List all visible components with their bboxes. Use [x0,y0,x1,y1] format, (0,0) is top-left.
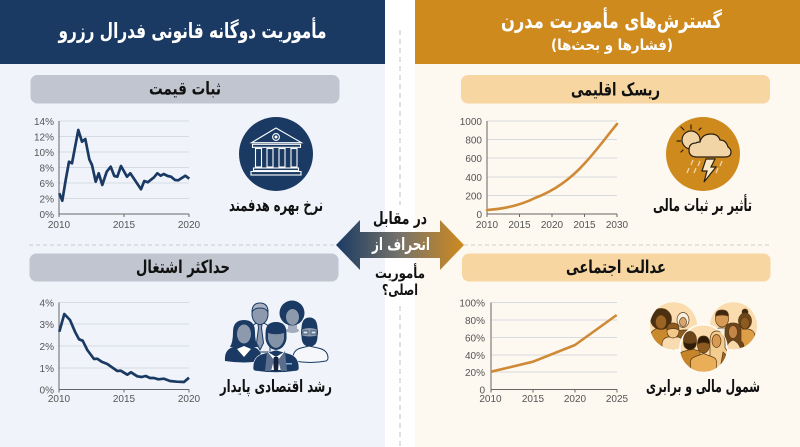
chart: climate risk curve: 2030 [606,220,629,231]
heading: climate risk: ریسک اقلیمی [571,80,660,100]
chart: price stability line: 2% [40,194,54,206]
heading: maximum employment [30,254,338,282]
chart: climate risk curve: 2015 [573,220,596,231]
chart: climate risk curve: 2015 [508,220,531,231]
icon: bank building [239,117,313,191]
chart: social justice line: 0 [479,386,485,396]
chart: social justice line: 20% [465,368,485,379]
heading: right header [415,0,800,64]
panel: maximum employment [30,254,338,405]
chart: employment line: 0% [40,386,54,396]
center callout: deviation from core mandate: در مقابل [373,209,427,229]
heading: maximum employment: حداکثر اشتغال [136,257,230,278]
chart: price stability line: 2020 [178,220,201,231]
chart: employment line: 2010 [48,394,71,405]
panel: social justice [459,254,770,405]
heading: right header: (فشارها و بحث‌ها) [551,36,673,54]
chart: price stability line [34,117,201,231]
chart: social justice line: 2015 [522,394,545,405]
chart: price stability line: 10% [34,148,54,159]
chart: climate risk curve: 600 [465,154,482,165]
chart: social justice line: 40% [465,351,485,362]
chart: employment line: 1% [40,364,54,375]
chart: climate risk curve [460,117,629,231]
chart: social justice line: 2025 [606,394,629,405]
chart: social justice line: 60% [465,334,485,344]
chart: price stability line: 12% [34,132,54,144]
chart: employment line [40,298,201,405]
chart: price stability line: 6% [40,179,54,190]
panel: price stability [30,75,340,231]
chart: price stability line: 2015 [113,220,136,231]
heading: left header [0,0,385,64]
panel: climate risk [460,75,770,231]
panel: left background [0,0,385,447]
heading: left header: مأموریت دوگانه قانونی فدرال رزرو [58,16,326,43]
chart: price stability line: 14% [34,117,54,128]
chart: price stability line: 0% [40,210,54,221]
chart: climate risk curve: 2010 [476,220,499,231]
center callout: deviation from core mandate: انحراف از [371,235,430,255]
heading: social justice [462,254,770,282]
chart: climate risk curve: 0 [476,210,482,221]
chart: price stability line: 8% [40,164,54,174]
heading: price stability [30,75,340,104]
chart: social justice line [459,298,629,405]
chart: climate risk curve: 400 [465,173,482,184]
chart: employment line: 2% [40,342,54,353]
heading: climate risk [461,75,770,104]
chart: employment line: 2020 [178,394,201,405]
label: target interest rate: نرخ بهره هدفمند [229,196,323,216]
chart: climate risk curve: 200 [465,192,482,202]
label: sustainable economic growth: رشد اقتصادی پایدار [219,377,332,397]
chart: employment line: 2015 [113,394,136,405]
icon: diverse people groups [650,302,757,375]
icon: storm cloud [666,117,740,191]
chart: employment line: 4% [40,298,54,310]
arrow: two-way gradient [336,220,464,270]
panel: right background [415,0,800,447]
center callout: deviation from core mandate [336,209,464,299]
heading: social justice: عدالت اجتماعی [566,257,666,278]
icon: group of professionals [225,300,328,372]
center callout: deviation from core mandate: مأموریت [375,263,425,282]
chart: social justice line: 2020 [564,394,587,405]
heading: price stability: ثبات قیمت [149,78,221,100]
chart: employment line: 3% [40,320,54,331]
chart: climate risk curve: 2020 [541,220,564,231]
chart: price stability line: 2010 [48,220,71,231]
label: impact on financial stability: تأثیر بر ثبات مالی [653,194,752,216]
center callout: deviation from core mandate: اصلی؟ [382,281,418,299]
heading: right header: گسترش‌های مأموریت مدرن [501,6,723,33]
chart: social justice line: 2010 [479,394,502,405]
chart: climate risk curve: 800 [465,136,482,146]
chart: social justice line: 100% [459,298,485,310]
chart: climate risk curve: 1000 [460,117,482,128]
chart: social justice line: 80% [465,316,485,327]
